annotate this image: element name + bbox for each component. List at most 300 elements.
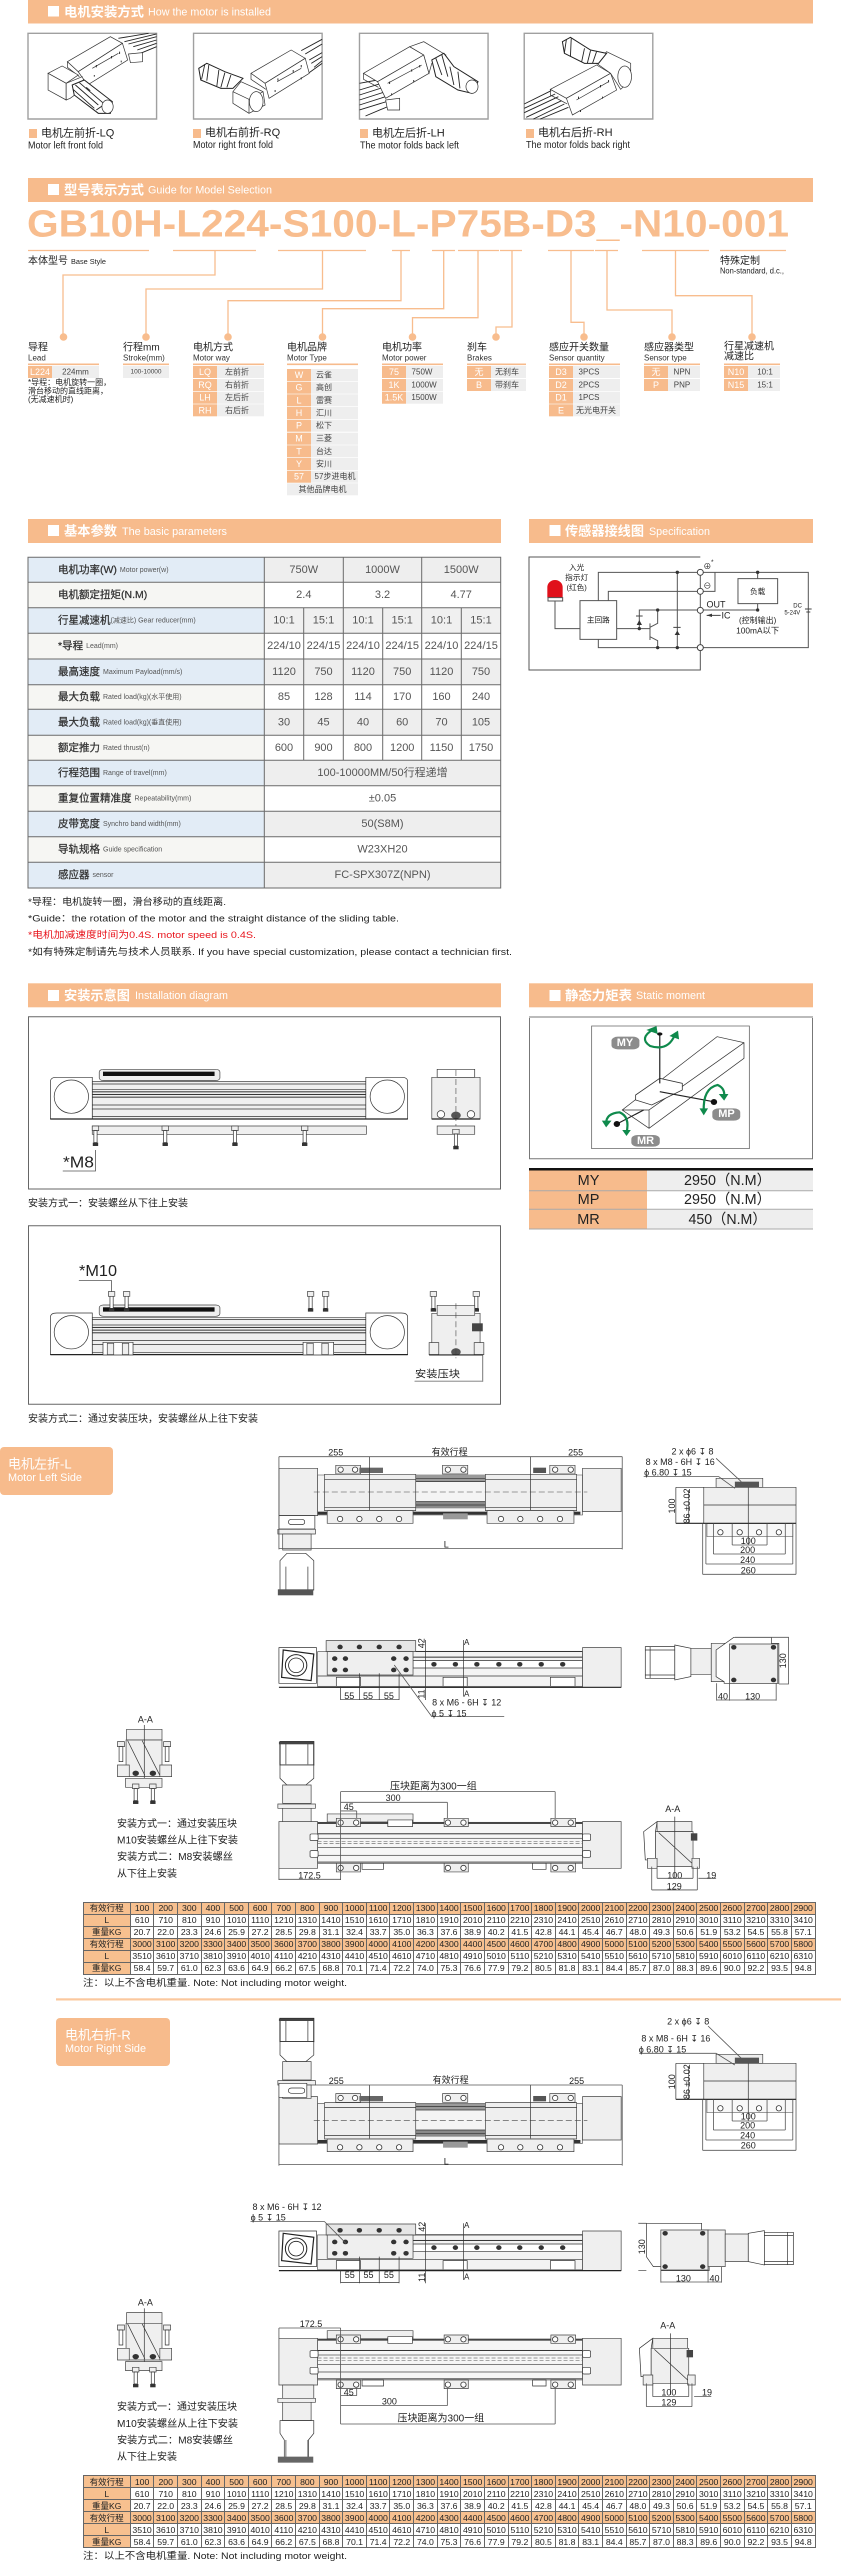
model code: GB10H-L224-S100-L-P75B-D3_-N10-001 [27, 204, 789, 246]
section header: model selection: Guide for Model Selection [148, 184, 272, 196]
table: static moment values: 450（N.M） [688, 1211, 766, 1228]
caption: RH: 电机右后折-RH [538, 125, 613, 139]
option column: motor power: 1000W [411, 380, 437, 390]
table: motor left stroke, length and weight: 70.1 [346, 1963, 363, 1973]
table: motor left stroke, length and weight: 88.3 [677, 1963, 694, 1973]
drawing: motor left section A-A right: 129 [667, 1882, 682, 1892]
table: motor right stroke, length and weight: 5700 [770, 2512, 789, 2522]
table: motor right stroke, length and weight: 6210 [770, 2524, 789, 2534]
table: motor right stroke, length and weight: 2710 [628, 2488, 648, 2498]
drawing: motor left front view [279, 1638, 621, 1718]
table: motor left stroke, length and weight: 5110 [510, 1951, 529, 1961]
option column: sensor quantity: 2PCS [579, 380, 599, 390]
parameters table: 最高速度 Maximum Payload(mm/s) [58, 665, 182, 678]
section header: static moment: 静态力矩表 [565, 987, 632, 1003]
section header: sensor wiring: Specification [649, 526, 710, 538]
drawing: motor right section A-A right: 19 [702, 2387, 712, 2397]
sensor wiring diagram: 100mA以下 [736, 626, 779, 636]
drawing: motor right bottom view: 172.5 [300, 2319, 322, 2329]
table: motor right stroke, length and weight: 88.3 [677, 2536, 694, 2546]
table: motor left stroke, length and weight: 27.2 [252, 1927, 269, 1937]
table: motor right stroke, length and weight: 500 [229, 2476, 244, 2486]
sensor wiring diagram: 指示灯 [565, 572, 588, 582]
parameters table: 224/15 [464, 640, 498, 652]
table: motor left stroke, length and weight: 58.4 [134, 1963, 151, 1973]
table: motor right stroke, length and weight: 1600 [487, 2476, 506, 2486]
parameters table: 224/15 [385, 640, 419, 652]
table: motor left stroke, length and weight: 3010 [699, 1915, 718, 1925]
option column: stroke: 100-10000 [130, 368, 162, 376]
table: motor left stroke, length and weight: 3910 [227, 1951, 246, 1961]
base style label: 本体型号 [28, 254, 68, 267]
table: motor right stroke, length and weight: 2010 [463, 2488, 482, 2498]
parameters table: 1150 [430, 742, 453, 754]
section header: model selection: 型号表示方式 [64, 182, 144, 198]
parameters table: 1750 [469, 742, 493, 754]
table: motor right stroke, length and weight: 5500 [723, 2512, 742, 2522]
drawing: motor left end view: 260 [741, 1565, 756, 1575]
table: motor right stroke, length and weight: 5010 [487, 2524, 506, 2534]
option column: sensor type: NPN [674, 368, 691, 376]
drawing: motor left section A-A right [644, 1804, 716, 1892]
table: motor left stroke, length and weight: 79.2 [511, 1963, 528, 1973]
table: motor left stroke, length and weight: 1810 [416, 1915, 435, 1925]
option column: motor type: P [296, 421, 302, 431]
option column: brakes: 刹车 [467, 340, 487, 354]
table: motor right stroke, length and weight: 4700 [534, 2512, 553, 2522]
table: motor right stroke, length and weight: 1000 [345, 2476, 364, 2486]
option column: motor type: L [296, 395, 302, 405]
table: motor right stroke, length and weight: 910 [206, 2488, 220, 2498]
option column: reduction ratio: N15 [728, 380, 744, 390]
table: motor left stroke, length and weight: 41.5 [511, 1927, 528, 1937]
table: motor right stroke, length and weight: 5300 [675, 2512, 695, 2522]
table: motor left stroke, length and weight: 51.9 [700, 1927, 717, 1937]
drawing: motor left top view [278, 1446, 622, 1595]
option column: sensor quantity: 感应开关数量 [549, 340, 609, 354]
table: motor left stroke, length and weight: 3710 [180, 1951, 199, 1961]
table: motor right stroke, length and weight: 84.4 [606, 2536, 623, 2546]
table: motor left stroke, length and weight: 3800 [321, 1939, 341, 1949]
section header: installation diagram: 安装示意图 [64, 987, 130, 1003]
table: motor right stroke, length and weight: 3200 [180, 2512, 199, 2522]
table: motor right stroke, length and weight: 1810 [416, 2488, 435, 2498]
drawing: motor left bottom view: 压块距离为300一组 [390, 1780, 477, 1792]
section header: installation diagram: Installation diagram [135, 990, 228, 1002]
option column: sensor quantity: E [558, 405, 564, 415]
drawing: motor right front view: 42 [417, 2222, 427, 2232]
table: motor right stroke, length and weight: 22.0 [157, 2500, 174, 2510]
option column: reduction ratio: 行星减速机 [724, 340, 774, 352]
caption: RQ [193, 125, 281, 151]
drawing: motor right front view: 55 [363, 2270, 374, 2280]
parameters table: W23XH20 [357, 844, 408, 856]
option column: sensor quantity: 无光电开关 [576, 405, 616, 415]
table: motor right stroke, length and weight: 4810 [439, 2524, 459, 2534]
text: motor right installation notes: 安装方式二：M8安装螺丝 [117, 2434, 233, 2446]
drawing: motor left top view: 255 [568, 1448, 583, 1458]
section header: basic parameters: The basic parameters [122, 526, 227, 538]
sensor wiring diagram: IC [721, 610, 731, 620]
table: motor left stroke, length and weight: 66.2 [275, 1963, 292, 1973]
option column: motor type: 台达 [316, 446, 332, 456]
table: motor left stroke, length and weight: 74.0 [417, 1963, 434, 1973]
table: motor left stroke, length and weight: 55.8 [771, 1927, 788, 1937]
parameters table: 50(S8M) [361, 818, 404, 830]
table: motor right stroke, length and weight: 4800 [557, 2512, 577, 2522]
drawing: motor left section A-A: A-A [138, 1714, 153, 1724]
table: motor right stroke, length and weight: 50.6 [677, 2500, 694, 2510]
parameters table [28, 557, 501, 888]
drawing: motor right section A-A right: A-A [660, 2321, 675, 2331]
option column: sensor quantity: D2 [555, 380, 567, 390]
table: motor right stroke, length and weight: 2800 [770, 2476, 789, 2486]
table: motor left stroke, length and weight: 5500 [723, 1939, 742, 1949]
option column: sensor type: 感应器类型 [644, 340, 694, 354]
base style label [28, 254, 106, 267]
table: motor left stroke, length and weight: 4900 [581, 1939, 600, 1949]
table: motor left stroke, length and weight: 2300 [652, 1903, 671, 1913]
table: motor left stroke, length and weight: 3810 [203, 1951, 223, 1961]
table: motor left stroke, length and weight: 800 [300, 1903, 315, 1913]
table: motor right stroke, length and weight: 77.9 [488, 2536, 505, 2546]
table: motor left stroke, length and weight: 2400 [675, 1903, 695, 1913]
parameters table: 750 [314, 666, 333, 678]
option column: motor way: RH [198, 405, 212, 415]
option column: motor power: 75 [389, 367, 399, 377]
table: motor left stroke, length and weight: 1700 [510, 1903, 530, 1913]
panel: motor right front fold [193, 33, 322, 151]
parameters table: 最大负载 Rated load(kg)(垂直使用) [58, 715, 182, 728]
table: motor left stroke, length and weight: 25.9 [228, 1927, 245, 1937]
drawing: motor left section A-A right: 19 [706, 1871, 716, 1881]
table: motor left stroke, length and weight: 54.5 [747, 1927, 764, 1937]
sensor wiring diagram: OUT [706, 600, 726, 610]
panel: motor folds back left [359, 33, 488, 152]
table: motor right stroke, length and weight: 1400 [439, 2476, 459, 2486]
table: motor right stroke, length and weight: 800 [300, 2476, 315, 2486]
drawing: motor right front view [250, 2202, 621, 2283]
table: motor left stroke, length and weight: 2710 [628, 1915, 648, 1925]
table: motor left stroke, length and weight: 6110 [747, 1951, 765, 1961]
drawing: motor right end view: 240 [740, 2130, 755, 2140]
table: motor left stroke, length and weight: 5010 [487, 1951, 506, 1961]
option column: motor power: 1500W [411, 393, 437, 402]
option column: motor power: 1K [388, 380, 400, 390]
badge: motor right side: Motor Right Side [65, 2043, 146, 2055]
badge: motor left side: Motor Left Side [8, 1472, 82, 1484]
table: motor left stroke, length and weight: 83.1 [582, 1963, 599, 1973]
parameters table: 1500W [444, 564, 479, 576]
table: motor right stroke, length and weight: 6010 [723, 2524, 742, 2534]
text: motor right installation notes: 安装方式一：通过安装压块 [117, 2400, 237, 2413]
table: motor right stroke, length and weight: 1310 [298, 2488, 317, 2498]
panel: static moment diagram: MP [718, 1108, 735, 1120]
option column: brakes: Brakes [467, 354, 492, 362]
parameters table: 60 [396, 716, 408, 728]
table: motor left stroke, length and weight: 3110 [723, 1915, 742, 1925]
option column: sensor type: P [653, 380, 659, 390]
parameter notes: *如有特殊定制请先与技术人员联系. If you have special customization, please contact a technician first. [28, 946, 512, 958]
table: motor right stroke, length and weight: 5600 [746, 2512, 766, 2522]
parameters table: 45 [317, 716, 330, 728]
option column: motor type: T [296, 446, 302, 456]
drawing: motor left end view [644, 1446, 796, 1575]
table: motor left stroke, length and weight: 1000 [345, 1903, 364, 1913]
parameters table: 行程范围 Range of travel(mm) [58, 766, 167, 779]
table: motor left stroke, length and weight: 1100 [369, 1903, 388, 1913]
option column: motor type: Y [296, 459, 302, 469]
option column: motor type: 高创 [316, 382, 332, 392]
table: motor left stroke, length and weight: 5310 [557, 1951, 577, 1961]
table: motor right stroke, length and weight: 35.0 [393, 2500, 410, 2510]
drawing: motor left end view: 100 [667, 1498, 677, 1514]
table: motor left stroke, length and weight: 2110 [487, 1915, 506, 1925]
table: motor right stroke, length and weight: 3310 [770, 2488, 789, 2498]
table: motor left stroke, length and weight: 20.7 [134, 1927, 151, 1937]
table: motor right stroke, length and weight: 93.5 [771, 2536, 788, 2546]
table: motor right stroke, length and weight: 2400 [675, 2476, 695, 2486]
parameters table: 224/10 [267, 640, 301, 652]
table: motor right stroke, length and weight: 81.8 [559, 2536, 576, 2546]
table: motor right stroke, length and weight: 32.4 [346, 2500, 363, 2510]
drawing: motor right motor side view [637, 2223, 793, 2283]
table: motor left stroke, length and weight: 76.6 [464, 1963, 481, 1973]
parameters table: *导程 Lead(mm) [58, 640, 118, 652]
badge: motor left side: 电机左折-L [8, 1456, 72, 1472]
table: motor left stroke, length and weight: L [104, 1951, 109, 1961]
table: motor right stroke, length and weight: 2810 [652, 2488, 671, 2498]
table: motor right stroke, length and weight: 5910 [699, 2524, 718, 2534]
drawing: motor left bottom view: 45 [344, 1802, 354, 1812]
option column: motor way: Motor way [193, 354, 230, 362]
panel: installation method one: *M8 [63, 1154, 94, 1172]
panel: installation method two: *M10 [79, 1263, 117, 1280]
parameters table: 重复位置精准度 Repeatability(mm) [58, 792, 191, 804]
table: motor right stroke, length and weight: 3610 [156, 2524, 175, 2534]
parameters table: 160 [432, 691, 451, 703]
parameters table: 额定推力 Rated thrust(n) [58, 741, 150, 754]
parameters table: 15:1 [470, 614, 492, 626]
table: motor left stroke, length and weight: 2200 [628, 1903, 648, 1913]
table: motor left stroke, length and weight: 57.1 [795, 1927, 812, 1937]
option column: motor power: 1.5K [385, 393, 403, 403]
section header: installation diagram [28, 983, 501, 1007]
table: motor right stroke, length and weight: 6310 [794, 2524, 813, 2534]
table: motor left stroke, length and weight: 2900 [794, 1903, 813, 1913]
table: motor right stroke, length and weight: 610 [135, 2488, 149, 2498]
table: motor right stroke, length and weight: 1500 [463, 2476, 482, 2486]
option column: lead [28, 342, 111, 404]
option column: sensor quantity: D1 [555, 393, 567, 403]
table: motor right stroke, length and weight: 2900 [794, 2476, 813, 2486]
table: motor left stroke, length and weight: 有效行程 [90, 1903, 124, 1913]
table: motor left stroke, length and weight: 2600 [723, 1903, 742, 1913]
table: motor left stroke, length and weight: 810 [182, 1915, 197, 1925]
drawing: motor left front view: 11 [417, 1689, 427, 1699]
table: motor right stroke, length and weight: 36.3 [417, 2500, 434, 2510]
sensor wiring diagram: (红色) [566, 582, 587, 592]
table: motor right stroke, length and weight: 1200 [392, 2476, 411, 2486]
table: motor left stroke, length and weight: 1210 [274, 1915, 293, 1925]
parameters table: 皮带宽度 Synchro band width(mm) [58, 817, 181, 830]
drawing: motor right bottom view: 压块距离为300一组 [398, 2412, 484, 2424]
section header: motor installation [28, 0, 813, 24]
text: motor left installation notes: 安装方式二：M8安装螺丝 [117, 1850, 233, 1863]
table: motor left stroke, length and weight: 84.4 [606, 1963, 623, 1973]
drawing: motor left motor side view: 130 [778, 1653, 788, 1668]
option column: motor type: M [295, 434, 303, 444]
parameters table: 电机功率(W) Motor power(w) [58, 563, 169, 576]
table: motor left stroke, length and weight: 3310 [770, 1915, 789, 1925]
drawing: motor left bottom view: 300 [386, 1793, 401, 1803]
table: motor right stroke, length and weight: 1510 [345, 2488, 364, 2498]
table: motor right stroke, length and weight: 59.7 [157, 2536, 174, 2546]
table: motor right stroke, length and weight: 76.6 [464, 2536, 481, 2546]
section header: static moment [529, 983, 813, 1007]
table: motor right stroke, length and weight: 1110 [251, 2488, 269, 2498]
option column: motor type: 安川 [316, 458, 332, 468]
table: motor left stroke, length and weight: 1200 [392, 1903, 411, 1913]
drawing: motor right end view: ϕ 6.80 ↧ 15 [639, 2044, 686, 2054]
drawing: motor right front view: ϕ 5 ↧ 15 [251, 2213, 286, 2223]
table: motor right stroke, length and weight: 4900 [581, 2512, 600, 2522]
table: motor left stroke, length and weight: 5300 [675, 1939, 695, 1949]
table: motor right stroke, length and weight: 42.8 [535, 2500, 552, 2510]
option column: motor type: 其他品牌电机 [298, 484, 346, 494]
parameter notes: *导程：电机旋转一圈，滑台移动的直线距离. [28, 896, 226, 908]
table: motor right stroke, length and weight: 3400 [227, 2512, 246, 2522]
table: motor right stroke, length and weight: 有效行程 [90, 2476, 124, 2486]
table: motor right stroke, length and weight: 5000 [605, 2512, 624, 2522]
sensor wiring diagram: 主回路 [587, 614, 610, 624]
drawing: motor right top view [278, 2018, 622, 2166]
option column: motor type: G [295, 383, 303, 393]
caption: LH: 电机左后折-LH [372, 126, 445, 140]
caption: installation method one: 安装方式一：安装螺丝从下往上安装 [28, 1196, 188, 1210]
option column: stroke: Stroke(mm) [123, 354, 165, 362]
parameters table: 750 [472, 666, 490, 678]
table: motor left stroke, length and weight: 4710 [416, 1951, 435, 1961]
table: motor left stroke, length and weight: 5410 [581, 1951, 600, 1961]
drawing: motor left front view: 42 [417, 1638, 427, 1648]
parameters table: 100-10000MM/50行程递增 [317, 765, 448, 779]
table: motor left stroke, length and weight: 23.3 [181, 1927, 198, 1937]
table: static moment values: 2950（N.M） [684, 1172, 771, 1189]
table: motor right stroke, length and weight: 2310 [534, 2488, 553, 2498]
option column: motor type: W [295, 370, 304, 380]
table: motor left stroke, length and weight: 4800 [557, 1939, 577, 1949]
table: motor right stroke, length and weight: 有效行程 [90, 2512, 124, 2522]
option column: brakes: B [476, 380, 482, 390]
table: motor left stroke, length and weight: 4610 [392, 1951, 411, 1961]
table: motor right stroke, length and weight: 3410 [794, 2488, 813, 2498]
table: motor left stroke, length and weight: 3700 [298, 1939, 317, 1949]
option column: sensor type [644, 340, 700, 391]
parameters table: 224/15 [307, 640, 340, 652]
table: motor right stroke, length and weight: 4010 [250, 2524, 270, 2534]
sensor indicator lamp [547, 580, 563, 601]
table: motor left stroke, length and weight: 50.6 [677, 1927, 694, 1937]
table: motor left stroke, length and weight: 6210 [770, 1951, 789, 1961]
panel: installation method two [28, 1226, 500, 1404]
table: motor right stroke, length and weight: 31.1 [322, 2500, 339, 2510]
table: motor left stroke, length and weight: 5910 [699, 1951, 718, 1961]
option column: reduction ratio: 15:1 [757, 380, 773, 390]
table: motor right stroke, length and weight: 66.2 [275, 2536, 292, 2546]
parameters table: 15:1 [391, 614, 413, 626]
table: motor left stroke, length and weight: 4510 [369, 1951, 388, 1961]
option column: sensor quantity: D3 [555, 367, 567, 377]
table: motor right stroke, length and weight: 200 [158, 2476, 173, 2486]
table: motor left stroke, length and weight: 4210 [298, 1951, 317, 1961]
table: motor right stroke, length and weight: 2500 [699, 2476, 718, 2486]
table: motor left stroke, length and weight: 1900 [557, 1903, 577, 1913]
table: static moment values: 2950（N.M） [684, 1191, 771, 1208]
option column: sensor type: Sensor type [644, 354, 687, 362]
option column: lead: *导程：电机旋转一圈， [28, 377, 111, 387]
table: motor left stroke, length and weight: 5610 [628, 1951, 648, 1961]
table: motor right stroke, length and weight: 3800 [321, 2512, 341, 2522]
parameters table: 1120 [272, 666, 296, 678]
option column: motor power [382, 340, 443, 404]
parameters table: 85 [278, 691, 290, 703]
text: motor right installation notes [117, 2400, 238, 2463]
option column: lead: Lead [28, 354, 46, 362]
table: motor left stroke, length and weight: 3000 [132, 1939, 152, 1949]
option column: lead: 滑台移动的直线距离， [28, 386, 108, 396]
drawing: motor left motor side view: 40 [718, 1692, 728, 1702]
table: motor right stroke, length and weight: 40.2 [488, 2500, 505, 2510]
panel: static moment diagram: MR [637, 1135, 654, 1147]
table: motor left stroke, length and weight: 67.5 [299, 1963, 316, 1973]
table: motor right stroke, length and weight: 4310 [321, 2524, 341, 2534]
table: motor right stroke, length and weight: 5110 [510, 2524, 529, 2534]
drawing: motor left front view: 55 [344, 1691, 354, 1701]
table: motor right stroke, length and weight: 重量KG [92, 2536, 121, 2546]
table: motor right stroke, length and weight: 100 [135, 2476, 149, 2486]
table: motor right stroke, length and weight: 2210 [510, 2488, 530, 2498]
table: motor right stroke, length and weight: 41.5 [511, 2500, 528, 2510]
drawing: motor right section A-A right [639, 2321, 712, 2408]
option column: reduction ratio [724, 340, 780, 391]
table: motor left stroke, length and weight: 5000 [605, 1939, 624, 1949]
table: motor left stroke, length and weight: 3600 [274, 1939, 293, 1949]
parameters table: 114 [354, 691, 372, 703]
table: motor left stroke, length and weight: 3200 [180, 1939, 199, 1949]
table: motor left stroke, length and weight: 5400 [699, 1939, 718, 1949]
table: motor right stroke, length and weight [83, 2475, 816, 2548]
table: motor right stroke, length and weight: 87.0 [653, 2536, 670, 2546]
table: motor left stroke, length and weight: 有效行程 [90, 1939, 124, 1949]
table: motor right stroke, length and weight: 23.3 [181, 2500, 198, 2510]
table: motor right stroke, length and weight: 4500 [487, 2512, 506, 2522]
table: motor right stroke, length and weight: 3010 [699, 2488, 718, 2498]
option column: motor power: Motor power [382, 354, 427, 362]
table: motor right stroke, length and weight: 79.2 [511, 2536, 528, 2546]
table: motor left stroke, length and weight: 5210 [534, 1951, 553, 1961]
table: motor right stroke, length and weight: 3910 [227, 2524, 246, 2534]
option column: motor type: 57步进电机 [315, 471, 355, 481]
sensor wiring diagram [529, 557, 812, 670]
table: motor left stroke, length and weight: 63.6 [228, 1963, 245, 1973]
table: motor left stroke, length and weight: 710 [158, 1915, 173, 1925]
table: motor right stroke, length and weight: 3810 [203, 2524, 223, 2534]
drawing: motor left end view: ϕ 6.80 ↧ 15 [644, 1468, 692, 1478]
parameters table: ±0.05 [369, 792, 396, 804]
table: motor right stroke, length and weight: 2410 [557, 2488, 577, 2498]
table: motor left stroke, length and weight: 910 [206, 1915, 220, 1925]
